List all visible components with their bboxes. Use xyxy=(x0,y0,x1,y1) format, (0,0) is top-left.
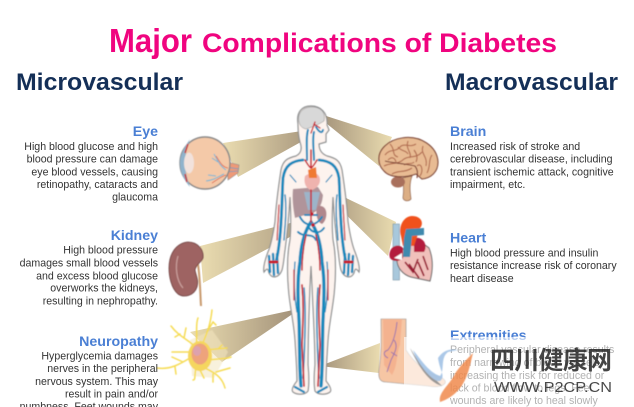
text: neuropathy: nervous system. This may xyxy=(35,376,159,388)
icon: nerve cell xyxy=(157,310,231,388)
text: extremities: from narrowing of blood vessels xyxy=(450,357,600,369)
text: eye: Eye xyxy=(133,124,158,140)
watermark overlay xyxy=(404,337,634,407)
text: kidney xyxy=(20,228,158,308)
beam: heart xyxy=(321,187,396,256)
text: heart: resistance increase risk of coronary xyxy=(450,260,617,272)
text: heart: High blood pressure and insulin xyxy=(450,248,599,260)
heading: microvascular: Microvascular xyxy=(16,69,183,96)
beam: eye xyxy=(223,129,317,177)
text: kidney: High blood pressure xyxy=(63,244,158,256)
text: heart xyxy=(450,230,617,285)
text: eye: blood pressure can damage xyxy=(27,154,158,166)
brain in head xyxy=(299,107,324,129)
text: kidney: and excess blood glucose xyxy=(36,270,158,282)
text: eye: glaucoma xyxy=(112,192,158,204)
icon: heart xyxy=(389,216,432,281)
watermark url: WWW.P2CP.CN xyxy=(494,379,612,396)
text: extremities: increasing the risk for reduced or xyxy=(450,370,605,382)
title xyxy=(109,22,557,59)
beam: neuropathy xyxy=(190,310,294,362)
beam: kidney xyxy=(200,215,322,283)
icon: foot xyxy=(379,319,445,387)
text: extremities xyxy=(449,328,614,407)
text: eye: eye blood vessels, causing xyxy=(31,166,158,178)
text: brain: cerebrovascular disease, including xyxy=(450,154,613,166)
text: extremities: Extremities xyxy=(450,328,527,344)
text: brain: Increased risk of stroke and xyxy=(450,141,580,153)
text: neuropathy: result in pain and/or xyxy=(65,388,158,400)
text: kidney: overworks the kidneys, xyxy=(50,282,158,294)
vessels: blue xyxy=(269,127,353,392)
text: brain: impairment, etc. xyxy=(450,179,525,191)
text: eye xyxy=(24,124,158,204)
text: neuropathy xyxy=(20,334,159,407)
text: brain: transient ischemic attack, cognitive xyxy=(450,166,614,178)
body outline xyxy=(264,106,359,394)
text: extremities: wounds are likely to heal slowly xyxy=(449,395,598,407)
text: eye: High blood glucose and high xyxy=(24,141,158,153)
icon: eye xyxy=(180,137,239,189)
icon: kidney xyxy=(169,242,203,306)
text: kidney: resulting in nephropathy. xyxy=(43,296,158,308)
watermark name: 四川健康网 xyxy=(490,347,612,375)
vessels: red xyxy=(270,122,352,386)
text: brain: Brain xyxy=(450,124,486,140)
text: kidney: damages small blood vessels xyxy=(20,258,158,270)
text: neuropathy: Neuropathy xyxy=(79,334,158,350)
organs xyxy=(293,187,323,218)
text: extremities: lack of blood flow to legs. Feet xyxy=(450,382,593,394)
text: neuropathy: Hyperglycemia damages xyxy=(41,350,158,362)
icon: watermark bird xyxy=(410,348,473,402)
heading: macrovascular: Macrovascular xyxy=(445,69,618,96)
text: eye: retinopathy, cataracts and xyxy=(37,179,158,191)
title: Major xyxy=(109,22,192,59)
icon: brain xyxy=(379,138,438,201)
text: kidney: Kidney xyxy=(111,228,158,244)
beam: extremities xyxy=(320,343,380,373)
text: extremities: Peripheral vascular disease results xyxy=(450,344,614,356)
text: brain xyxy=(450,124,614,191)
text: heart: Heart xyxy=(450,230,487,246)
text: neuropathy: nerves in the peripheral xyxy=(47,363,158,375)
text: heart: heart disease xyxy=(450,273,514,285)
human body figure xyxy=(264,106,359,394)
heart in chest xyxy=(304,173,320,190)
beam: brain xyxy=(321,115,392,166)
title: Complications of Diabetes xyxy=(202,28,557,58)
